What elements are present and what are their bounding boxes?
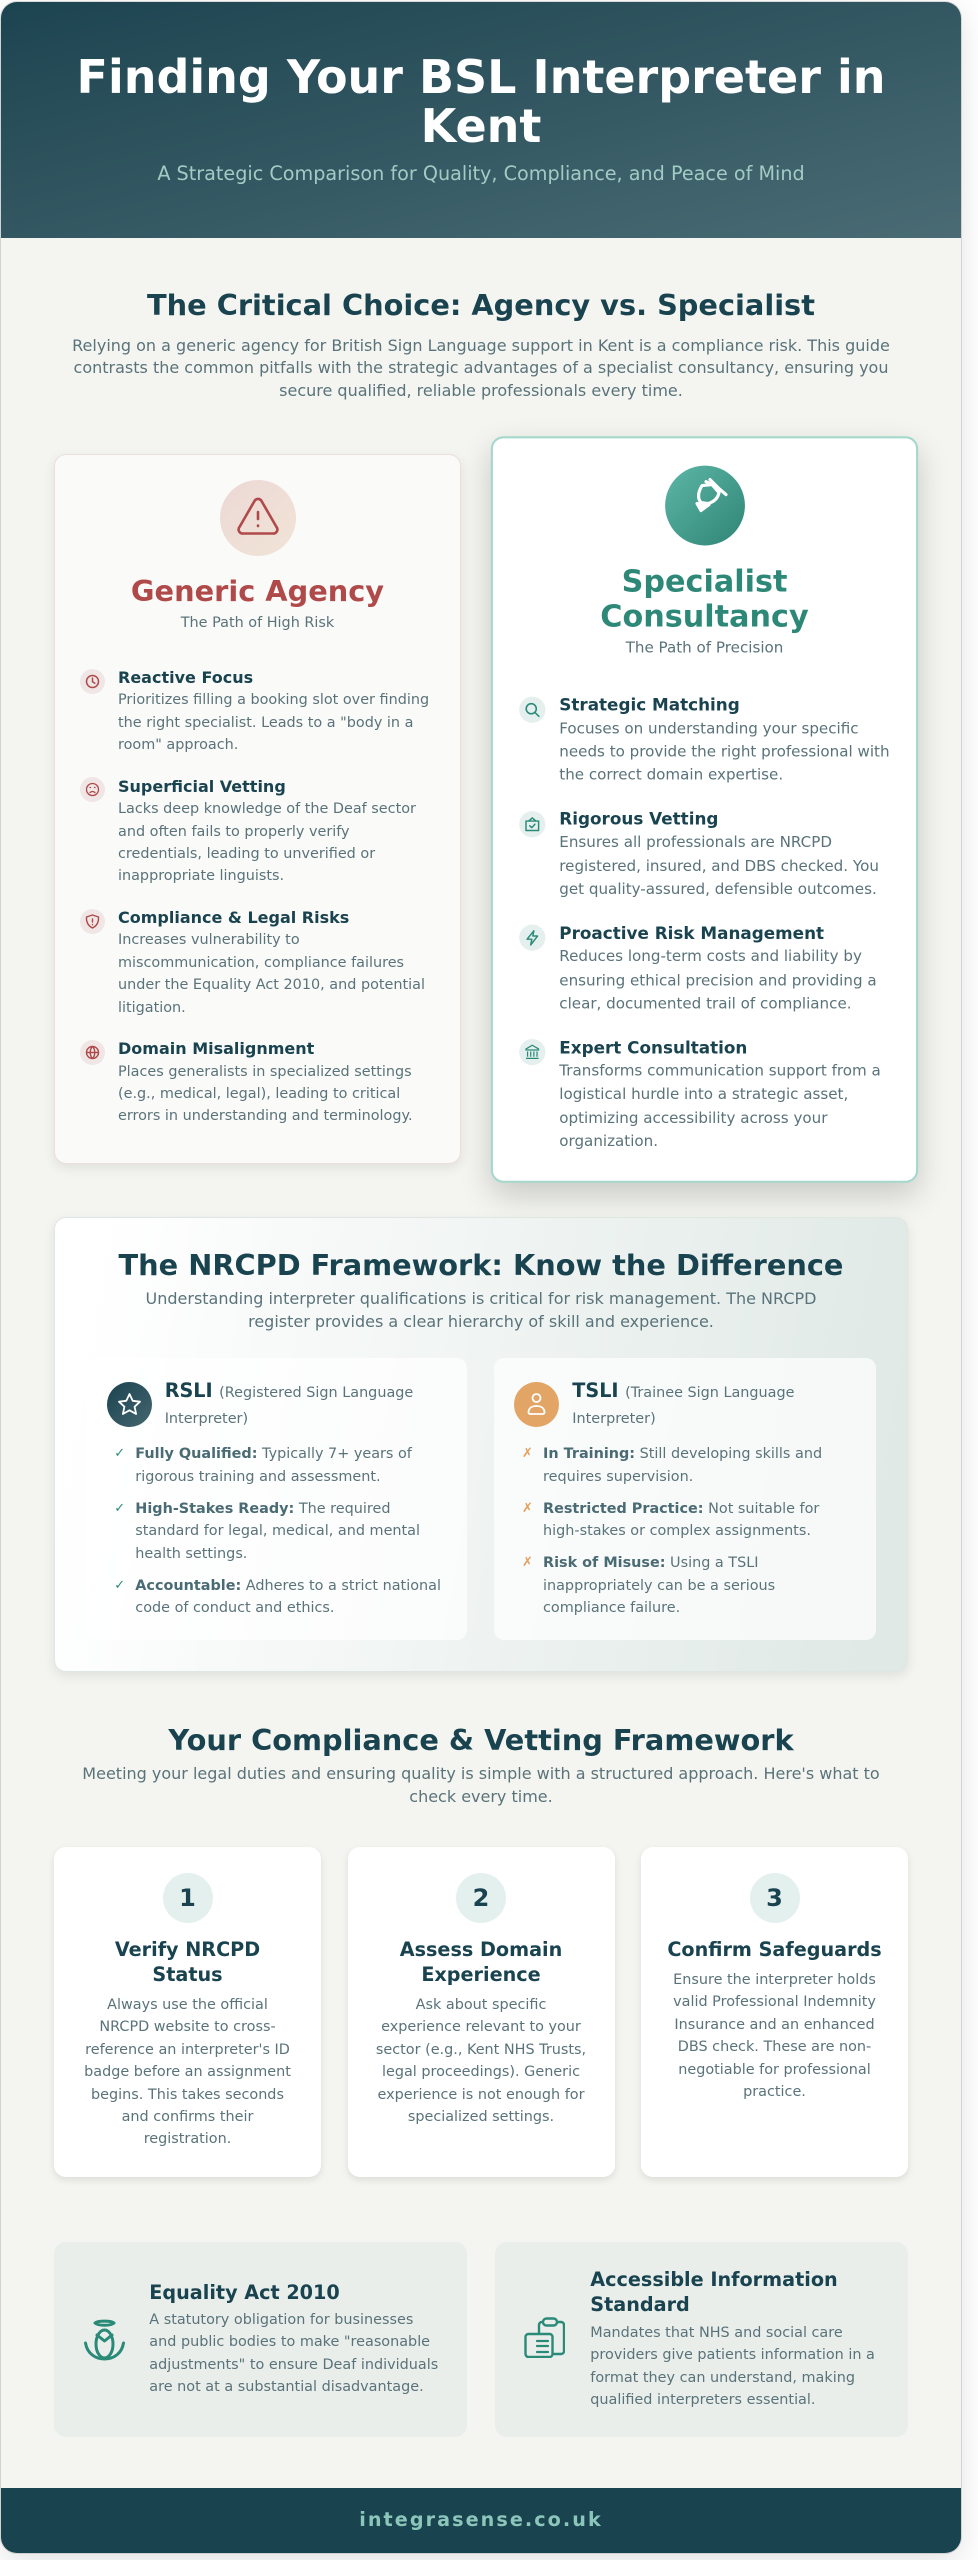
compliance intro text: check every time.: [409, 1787, 553, 1806]
icon: globe: [80, 1040, 105, 1065]
step card 2: [348, 1847, 614, 2177]
step 2 text: experience is not enough for: [377, 2087, 585, 2103]
item: expert consultation: Transforms communication support from a: [559, 1063, 881, 1079]
icon: bank: [519, 1039, 545, 1065]
step 3 text: [673, 1972, 876, 2100]
card: TSLI: ✗: [522, 1446, 533, 1461]
number 3: [750, 1873, 800, 1923]
NRCPD intro text: Understanding interpreter qualifications is critical for risk management. The NRCPD: [146, 1289, 816, 1308]
accessible information text: providers give patients information in a: [590, 2347, 875, 2363]
icon: clipboards: [524, 2317, 565, 2358]
heading: compliance framework: Your Compliance & Vetting Framework: [168, 1723, 794, 1757]
item: reactive focus: Reactive Focus: [118, 668, 253, 687]
item: compliance and legal risks: Compliance & Legal Risks: [118, 908, 349, 927]
item: proactive risk management: Reduces long-term costs and liability by: [559, 948, 862, 965]
step card 1: [54, 1847, 321, 2177]
item: domain misalignment: errors in understanding and terminology.: [118, 1108, 413, 1124]
heading: specialist consultancy: Specialist: [622, 563, 787, 599]
panel: accessible information standard: [494, 2242, 908, 2437]
item: superficial vetting: and often fails to properly verify: [118, 824, 350, 840]
item: compliance and legal risks: litigation.: [118, 1000, 186, 1016]
step 2 heading: [400, 1938, 562, 1986]
equality act text: adjustments" to ensure Deaf individuals: [149, 2357, 438, 2373]
step 1 text: registration.: [144, 2131, 231, 2147]
step 2 heading: Experience: [421, 1963, 541, 1986]
compliance intro text: [82, 1764, 880, 1806]
bullet: restricted practice: Restricted Practice: Not suitable for: [543, 1501, 819, 1517]
item: compliance and legal risks: under the Equality Act 2010, and potential: [118, 977, 425, 993]
equality act heading: Equality Act 2010: [149, 2281, 340, 2304]
item: domain misalignment: Places generalists in specialized settings: [118, 1064, 412, 1080]
heading: specialist consultancy: Consultancy: [600, 597, 809, 633]
card: TSLI: ✗: [522, 1555, 533, 1570]
equality act text: and public bodies to make "reasonable: [149, 2334, 430, 2350]
bullet: high stakes ready: standard for legal, medical, and mental: [135, 1523, 420, 1539]
item: expert consultation: optimizing accessibility across your: [559, 1110, 827, 1126]
icon: star: [107, 1382, 152, 1427]
step 2 text: Ask about specific: [416, 1997, 546, 2013]
number 1: 1: [179, 1884, 196, 1912]
step 1 text: reference an interpreter's ID: [85, 2042, 290, 2058]
bullet: accountable: code of conduct and ethics.: [135, 1600, 334, 1616]
accessible information heading: [590, 2268, 838, 2316]
icon: sad face: [80, 777, 105, 802]
item: reactive focus: the right specialist. Leads to a "body in a: [118, 715, 413, 731]
intro text: [72, 336, 890, 400]
number 2: 2: [473, 1884, 489, 1912]
card: TSLI: [494, 1358, 876, 1640]
item: superficial vetting: Lacks deep knowledge of the Deaf sector: [118, 801, 416, 817]
accessible information text: qualified interpreters essential.: [590, 2392, 815, 2408]
item: rigorous vetting: [519, 808, 879, 898]
item: rigorous vetting: registered, insured, and DBS checked. You: [559, 858, 879, 874]
step 1 text: NRCPD website to cross-: [99, 2019, 276, 2035]
heading: generic agency: Generic Agency: [131, 574, 384, 608]
item: superficial vetting: inappropriate linguists.: [118, 868, 284, 884]
icon: warning triangle: [220, 480, 296, 556]
title: [77, 50, 885, 153]
bullet: in training: [522, 1446, 822, 1485]
number 1: [162, 1873, 212, 1923]
item: strategic matching: the correct domain expertise.: [559, 767, 783, 784]
bullet: high stakes ready: health settings.: [135, 1546, 247, 1562]
accessible information text: Mandates that NHS and social care: [590, 2325, 843, 2341]
step 2 text: sector (e.g., Kent NHS Trusts,: [376, 2042, 586, 2058]
panel: NRCPD framework: [54, 1217, 908, 1672]
RSLI title: Interpreter): [165, 1411, 248, 1427]
item: expert consultation: [519, 1037, 881, 1150]
compliance intro text: Meeting your legal duties and ensuring quality is simple with a structured approach. Here's what to: [82, 1764, 880, 1783]
TSLI title: [572, 1379, 794, 1427]
step 2 text: experience relevant to your: [381, 2019, 581, 2035]
icon: bolt: [519, 924, 545, 951]
header banner: [1, 2, 961, 238]
step 1 text: badge before an assignment: [84, 2064, 291, 2080]
bullet: fully qualified: [114, 1446, 412, 1485]
RSLI title: RSLI (Registered Sign Language: [165, 1379, 413, 1402]
icon: equality figure: [84, 2320, 125, 2360]
card: RSLI: ✓: [114, 1446, 125, 1461]
footer: integrasense.co.uk: [359, 2508, 603, 2531]
item: expert consultation: logistical hurdle into a strategic asset,: [559, 1086, 848, 1103]
step 3 text: negotiable for professional: [678, 2062, 871, 2078]
icon: person: [514, 1382, 559, 1427]
step 2 heading: Assess Domain: [400, 1938, 562, 1961]
item: strategic matching: Focuses on understanding your specific: [559, 720, 859, 737]
NRCPD intro text: register provides a clear hierarchy of skill and experience.: [248, 1312, 714, 1331]
bullet: fully qualified: Fully Qualified: Typically 7+ years of: [135, 1446, 412, 1462]
step 2 text: legal proceedings). Generic: [382, 2064, 580, 2080]
accessible information text: format they can understand, making: [590, 2370, 855, 2386]
icon: clock: [80, 669, 105, 694]
item: rigorous vetting: Rigorous Vetting: [559, 808, 718, 828]
card: TSLI: ✗: [522, 1501, 533, 1516]
item: strategic matching: [519, 694, 890, 784]
item: expert consultation: Expert Consultation: [559, 1037, 747, 1057]
step 1 text: and confirms their: [122, 2109, 253, 2125]
item: compliance and legal risks: Increases vulnerability to: [118, 932, 300, 948]
TSLI title: TSLI (Trainee Sign Language: [572, 1379, 794, 1402]
subtitle: A Strategic Comparison for Quality, Compliance, and Peace of Mind: [157, 162, 805, 185]
step 3 text: practice.: [743, 2084, 806, 2100]
RSLI title: [165, 1379, 413, 1427]
icon: badge check: [519, 810, 545, 836]
item: domain misalignment: [80, 1039, 413, 1124]
step 3 text: Insurance and an enhanced: [674, 2017, 875, 2033]
item: reactive focus: [80, 668, 429, 753]
bullet: risk of misuse: compliance failure.: [543, 1600, 680, 1616]
bullet: high stakes ready: High-Stakes Ready: The required: [135, 1501, 390, 1517]
step 1 text: Always use the official: [107, 1997, 268, 2013]
card: RSLI: ✓: [114, 1501, 125, 1516]
step 2 text: [376, 1997, 586, 2125]
item: proactive risk management: ensuring ethical precision and providing a: [559, 972, 877, 989]
bullet: high stakes ready: [114, 1501, 420, 1562]
icon: hand: [665, 465, 744, 544]
item: proactive risk management: Proactive Risk Management: [559, 923, 824, 943]
bullet: restricted practice: high-stakes or complex assignments.: [543, 1523, 811, 1539]
bullet: fully qualified: rigorous training and assessment.: [135, 1469, 381, 1485]
title: Kent: [421, 99, 541, 153]
icon: shield: [80, 909, 105, 934]
card: RSLI: [86, 1358, 467, 1640]
item: proactive risk management: [519, 923, 877, 1012]
heading: NRCPD framework: The NRCPD Framework: Know the Difference: [119, 1248, 843, 1282]
subheading: The Path of High Risk: [181, 615, 334, 631]
item: domain misalignment: (e.g., medical, legal), leading to critical: [118, 1086, 400, 1102]
item: proactive risk management: clear, documented trail of compliance.: [559, 995, 852, 1012]
card: RSLI: ✓: [114, 1578, 125, 1592]
item: compliance and legal risks: miscommunication, compliance failures: [118, 955, 404, 971]
step 3 text: Ensure the interpreter holds: [673, 1972, 876, 1988]
item: strategic matching: needs to provide the right professional with: [559, 743, 890, 760]
number 2: [456, 1873, 506, 1923]
accessible information heading: Standard: [590, 2293, 690, 2316]
accessible information heading: Accessible Information: [590, 2268, 838, 2291]
step 3 heading: Confirm Safeguards: [667, 1938, 882, 1961]
intro text: Relying on a generic agency for British Sign Language support in Kent is a compliance risk. This guide: [72, 336, 890, 355]
subheading: The Path of Precision: [626, 639, 783, 656]
item: strategic matching: Strategic Matching: [559, 694, 740, 714]
step 1 heading: Verify NRCPD: [115, 1938, 260, 1961]
panel: equality act: [54, 2242, 467, 2437]
step 1 text: begins. This takes seconds: [91, 2087, 284, 2103]
item: expert consultation: organization.: [559, 1133, 658, 1150]
accessible information text: [590, 2325, 875, 2408]
item: domain misalignment: Domain Misalignment: [118, 1039, 314, 1058]
item: rigorous vetting: get quality-assured, defensible outcomes.: [559, 881, 877, 898]
bullet: risk of misuse: inappropriately can be a serious: [543, 1578, 775, 1594]
item: rigorous vetting: Ensures all professionals are NRCPD: [559, 834, 832, 851]
item: compliance and legal risks: [80, 908, 425, 1016]
bullet: risk of misuse: Risk of Misuse: Using a TSLI: [543, 1555, 758, 1571]
step 2 text: specialized settings.: [408, 2109, 554, 2125]
item: superficial vetting: credentials, leading to unverified or: [118, 846, 375, 862]
bullet: accountable: [114, 1578, 441, 1616]
step 1 text: [84, 1997, 291, 2147]
equality act text: are not at a substantial disadvantage.: [149, 2379, 424, 2395]
step 1 heading: Status: [152, 1963, 223, 1986]
bullet: accountable: Accountable: Adheres to a strict national: [135, 1578, 441, 1594]
bullet: in training: In Training: Still developing skills and: [543, 1446, 822, 1462]
item: superficial vetting: Superficial Vetting: [118, 777, 286, 796]
icon: search: [519, 696, 545, 722]
step 3 text: valid Professional Indemnity: [673, 1994, 876, 2010]
bullet: restricted practice: [522, 1501, 820, 1539]
item: reactive focus: room" approach.: [118, 737, 238, 753]
NRCPD intro text: [146, 1289, 816, 1331]
panel: specialist consultancy: [491, 436, 918, 1182]
footer: [1, 2488, 961, 2553]
heading: specialist consultancy: [600, 563, 809, 633]
heading: critical choice: The Critical Choice: Agency vs. Specialist: [147, 288, 815, 322]
item: reactive focus: Prioritizes filling a booking slot over finding: [118, 692, 429, 708]
step 3 text: DBS check. These are non-: [678, 2039, 871, 2055]
item: superficial vetting: [80, 777, 416, 884]
intro text: contrasts the common pitfalls with the strategic advantages of a specialist consultancy, ensuring you: [74, 358, 888, 377]
bullet: risk of misuse: [522, 1555, 775, 1616]
TSLI title: Interpreter): [572, 1411, 656, 1427]
number 3: 3: [766, 1884, 783, 1912]
panel: generic agency: [54, 454, 461, 1164]
step card 3: [641, 1847, 908, 2177]
intro text: secure qualified, reliable professionals every time.: [279, 381, 683, 400]
bullet: in training: requires supervision.: [543, 1469, 693, 1485]
equality act text: [149, 2312, 438, 2395]
step 1 heading: [115, 1938, 260, 1986]
title: Finding Your BSL Interpreter in: [77, 50, 885, 104]
equality act text: A statutory obligation for businesses: [149, 2312, 413, 2328]
